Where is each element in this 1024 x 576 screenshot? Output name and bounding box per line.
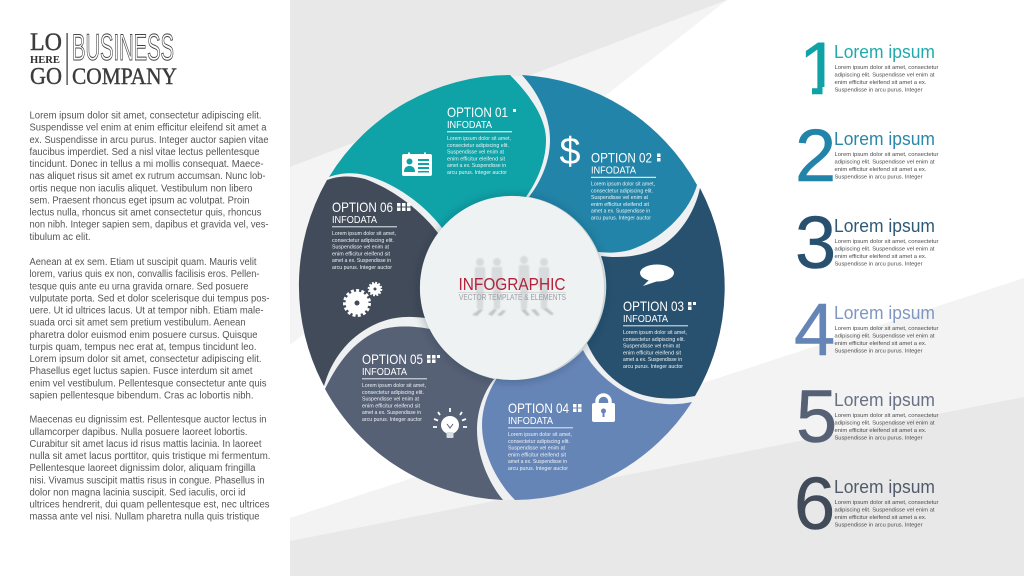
panel: legend item 3: enim efficitur eleifend sit amet a ex. bbox=[834, 254, 927, 260]
option 05 text: Suspendisse vel enim at bbox=[362, 397, 419, 403]
text block: paragraph 2: Lorem ipsum dolor sit amet, consectetur adipiscing elit. bbox=[30, 354, 262, 365]
panel: legend item 4: Lorem ipsum dolor sit amet, consectetur bbox=[834, 326, 939, 332]
logo: HERE bbox=[30, 55, 60, 66]
option 02 text: enim efficitur eleifend sit bbox=[591, 202, 649, 208]
panel: legend item 4: 4 bbox=[794, 288, 835, 371]
text block: paragraph 1: tincidunt. Donec in tellus a mi mollis consequat. Maece- bbox=[30, 159, 264, 170]
option 01 text: OPTION 01 bbox=[447, 104, 508, 120]
option 05 text bbox=[362, 351, 440, 423]
logo: GO bbox=[30, 64, 62, 90]
panel: legend item 5: enim efficitur eleifend sit amet a ex. bbox=[834, 428, 927, 434]
option 05 text: arcu purus. Integer auctor bbox=[362, 417, 422, 423]
text block: paragraph 1: Suspendisse vel enim at enim efficitur eleifend sit amet a bbox=[30, 123, 267, 134]
option 01 text bbox=[447, 104, 516, 176]
panel: legend item 6 bbox=[794, 462, 939, 545]
text block: paragraph 1: tibulum ac elit. bbox=[30, 232, 90, 243]
segment 5 bbox=[325, 326, 503, 500]
panel: legend item 4 bbox=[794, 288, 939, 371]
option 01 text: amet a ex. Suspendisse in bbox=[447, 163, 506, 169]
panel: legend item 6: Suspendisse in arcu purus. Integer bbox=[834, 522, 923, 528]
panel: legend item 3: Lorem ipsum bbox=[834, 216, 935, 236]
option 04 text: INFODATA bbox=[508, 415, 553, 427]
option 02 text: Suspendisse vel enim at bbox=[591, 195, 648, 201]
panel: legend item 1: adipiscing elit. Suspendisse vel enim at bbox=[834, 72, 935, 78]
panel: legend item 1 bbox=[806, 42, 938, 94]
option 02 text: arcu purus. Integer auctor bbox=[591, 216, 651, 222]
option 06 text: Lorem ipsum dolor sit amet, bbox=[332, 231, 396, 237]
option 02 text: amet a ex. Suspendisse in bbox=[591, 209, 650, 215]
logo bbox=[30, 27, 177, 90]
text block: paragraph 1: faucibus imperdiet. Sed a nisl vitae lectus pellentesque bbox=[30, 147, 260, 158]
option 03 text: enim efficitur eleifend sit bbox=[623, 350, 681, 356]
option 02 text: INFODATA bbox=[591, 164, 636, 176]
panel: legend item 4: enim efficitur eleifend sit amet a ex. bbox=[834, 341, 927, 347]
panel: legend item 6: enim efficitur eleifend sit amet a ex. bbox=[834, 515, 927, 521]
option 06 text: INFODATA bbox=[332, 214, 377, 226]
panel: legend item 4: adipiscing elit. Suspendisse vel enim at bbox=[834, 334, 935, 340]
text block: paragraph 2: pharetra dolor euismod enim posuere cursus. Quisque bbox=[30, 330, 258, 341]
icon: lock bbox=[592, 395, 615, 422]
panel: legend item 1: 1 bbox=[799, 27, 840, 110]
segment 4 bbox=[482, 350, 692, 500]
center circle bbox=[420, 196, 604, 380]
segment 1 bbox=[329, 75, 546, 228]
text block: paragraph 1: ortis neque non iaculis aliquet. Vestibulum non libero bbox=[30, 183, 253, 194]
panel: legend item 2: enim efficitur eleifend sit amet a ex. bbox=[834, 167, 927, 173]
option 05 text: enim efficitur eleifend sit bbox=[362, 403, 420, 409]
option 06 text bbox=[332, 199, 410, 271]
option 05 text: INFODATA bbox=[362, 366, 407, 378]
text block: paragraph 2: lorem, varius quis ex non, convallis facilisis eros. Pellen- bbox=[30, 269, 260, 280]
panel: legend item 5: Lorem ipsum dolor sit amet, consectetur bbox=[834, 413, 939, 419]
text block: paragraph 2: turpis quam, tempus nec erat at, tempus tincidunt leo. bbox=[30, 342, 256, 353]
option 03 text: INFODATA bbox=[623, 313, 668, 325]
option 03 text: OPTION 03 bbox=[623, 298, 684, 314]
text block: paragraph 3: nulla sit amet lacus porttitor, quis tristique mi fermentum. bbox=[30, 451, 270, 462]
panel: legend item 2: Lorem ipsum bbox=[834, 129, 935, 149]
text block: paragraph 1: sem. Praesent rhoncus eget ipsum ac volutpat. Proin bbox=[30, 195, 250, 206]
text block: paragraph 1: non nibh. Integer sapien sem, dapibus et gravida vel, ves- bbox=[30, 220, 268, 231]
text block: paragraph 2: suada orci sit amet sem pretium vestibulum. Aenean bbox=[30, 318, 246, 329]
panel: legend item 5: Suspendisse in arcu purus. Integer bbox=[834, 436, 923, 442]
option 01 text: Lorem ipsum dolor sit amet, bbox=[447, 136, 511, 142]
panel: legend item 2: Lorem ipsum dolor sit amet, consectetur bbox=[834, 152, 939, 158]
option 06 text: arcu purus. Integer auctor bbox=[332, 265, 392, 271]
text block: paragraph 2: vulputate porta. Sed et dolor scelerisque dui tempus pos- bbox=[30, 293, 270, 304]
text block: paragraph 1: nas aliquet risus sit amet ex rutrum accumsan. Nunc lob- bbox=[30, 171, 266, 182]
option 04 text: Lorem ipsum dolor sit amet, bbox=[508, 432, 572, 438]
text block: paragraph 3: ullamcorper dapibus. Nulla posuere laoreet lobortis. bbox=[30, 427, 248, 438]
panel: legend item 3: 3 bbox=[795, 201, 836, 284]
text block: paragraph 2 bbox=[30, 257, 270, 401]
panel: legend item 3: adipiscing elit. Suspendisse vel enim at bbox=[834, 246, 935, 252]
panel: legend item 1: Lorem ipsum bbox=[834, 42, 935, 62]
panel: legend item 6: Lorem ipsum dolor sit amet, consectetur bbox=[834, 500, 939, 506]
text block: paragraph 2: sapien pellentesque bibendum. Cras ac lobortis nibh. bbox=[30, 390, 254, 401]
text block: paragraph 1: lectus nulla, rhoncus sit amet consectetur quis, rhoncus bbox=[30, 208, 262, 218]
panel: legend item 5 bbox=[796, 375, 939, 458]
option 05 text: Lorem ipsum dolor sit amet, bbox=[362, 383, 426, 389]
segment 2 bbox=[522, 75, 697, 253]
option 01 text: consectetur adipiscing elit. bbox=[447, 143, 509, 149]
option 06 text: enim efficitur eleifend sit bbox=[332, 251, 390, 257]
panel: legend item 3: Suspendisse in arcu purus. Integer bbox=[834, 262, 923, 268]
chart: circular segments bbox=[299, 75, 725, 500]
text block: paragraph 2: tesque quis ante eu urna gravida ornare. Sed posuere bbox=[30, 281, 249, 292]
text block: paragraph 3: nisi. Vivamus suscipit mattis risus in congue. Phasellus in bbox=[30, 475, 264, 486]
text block: paragraph 3: Maecenas eu dignissim est. Pellentesque auctor lectus in bbox=[30, 415, 266, 426]
panel: legend item 2: Suspendisse in arcu purus. Integer bbox=[834, 174, 923, 180]
panel: left text column bbox=[30, 27, 270, 523]
option 03 text: arcu purus. Integer auctor bbox=[623, 364, 683, 370]
option 04 text: OPTION 04 bbox=[508, 400, 569, 416]
option 05 text: OPTION 05 bbox=[362, 351, 423, 367]
panel: legend item 5: Lorem ipsum bbox=[834, 390, 935, 410]
option 04 text: amet a ex. Suspendisse in bbox=[508, 459, 567, 465]
option 04 text: arcu purus. Integer auctor bbox=[508, 466, 568, 472]
option 03 text: amet a ex. Suspendisse in bbox=[623, 357, 682, 363]
segment 6 bbox=[299, 176, 438, 386]
option 05 text: consectetur adipiscing elit. bbox=[362, 390, 424, 396]
panel: legend item 3 bbox=[795, 201, 939, 284]
panel: legend item 2 bbox=[795, 114, 939, 197]
panel: legend item 1: enim efficitur eleifend sit amet a ex. bbox=[834, 80, 927, 86]
option 01 text: INFODATA bbox=[447, 119, 492, 131]
option 05 text: amet a ex. Suspendisse in bbox=[362, 410, 421, 416]
panel: legend item 3: Lorem ipsum dolor sit amet, consectetur bbox=[834, 239, 939, 245]
panel: legend item 6: Lorem ipsum bbox=[834, 477, 935, 497]
option 04 text: enim efficitur eleifend sit bbox=[508, 452, 566, 458]
icon: dollar: $ bbox=[560, 131, 580, 173]
icon: people silhouettes bbox=[472, 256, 554, 316]
logo: LO bbox=[30, 29, 62, 56]
option 02 text: consectetur adipiscing elit. bbox=[591, 188, 653, 194]
icon: id card bbox=[402, 152, 432, 176]
heading: infographic: INFOGRAPHIC bbox=[458, 274, 566, 294]
panel: legend item 5: adipiscing elit. Suspendisse vel enim at bbox=[834, 420, 935, 426]
option 04 text: Suspendisse vel enim at bbox=[508, 446, 565, 452]
text block: paragraph 2: uere. Ut id ultrices lacus. Ut at tempor nibh. Etiam male- bbox=[30, 306, 264, 316]
panel: legend item 2: adipiscing elit. Suspendisse vel enim at bbox=[834, 160, 935, 166]
panel: legend item 2: 2 bbox=[795, 114, 836, 197]
text block: paragraph 1: ex. Suspendisse in arcu purus. Integer auctor sapien vitae bbox=[30, 135, 269, 146]
text block: paragraph 3: Pellentesque laoreet dignissim dolor, aliquam fringilla bbox=[30, 463, 256, 474]
option 06 text: Suspendisse vel enim at bbox=[332, 245, 389, 251]
option 03 text: Lorem ipsum dolor sit amet, bbox=[623, 330, 687, 336]
text block: paragraph 2: Phasellus eget luctus sapien. Fusce interdum sit amet bbox=[30, 366, 253, 377]
option 04 text: consectetur adipiscing elit. bbox=[508, 439, 570, 445]
option 06 text: OPTION 06 bbox=[332, 199, 393, 215]
panel: legend item 4: Lorem ipsum bbox=[834, 303, 935, 323]
option 03 text bbox=[623, 298, 696, 370]
panel: legend item 6: adipiscing elit. Suspendisse vel enim at bbox=[834, 508, 935, 514]
option 04 text bbox=[508, 400, 582, 472]
option 01 text: arcu purus. Integer auctor bbox=[447, 170, 507, 176]
text block: paragraph 3: Curabitur sit amet lacus id risus mattis lacinia. In laoreet bbox=[30, 439, 262, 450]
text block: paragraph 1: Lorem ipsum dolor sit amet, consectetur adipiscing elit. bbox=[30, 110, 262, 122]
text block: paragraph 1 bbox=[30, 110, 269, 243]
option 03 text: Suspendisse vel enim at bbox=[623, 344, 680, 350]
option 01 text: Suspendisse vel enim at bbox=[447, 150, 504, 156]
option 01 text: enim efficitur eleifend sit bbox=[447, 156, 505, 162]
text block: paragraph 3 bbox=[30, 415, 270, 523]
panel: legend item 5: 5 bbox=[796, 375, 837, 458]
panel: legend item 1: Lorem ipsum dolor sit amet, consectetur bbox=[834, 65, 939, 71]
text block: paragraph 3: massa ante vel nisi. Nullam pharetra nulla quis tristique bbox=[30, 512, 260, 523]
icon: light bulb bbox=[433, 408, 467, 438]
logo: COMPANY bbox=[72, 64, 177, 89]
option 02 text: OPTION 02 bbox=[591, 150, 652, 166]
text block: paragraph 2: Aenean at ex sem. Etiam ut suscipit quam. Mauris velit bbox=[30, 257, 257, 268]
icon: speech bubble bbox=[640, 264, 674, 286]
option 06 text: amet a ex. Suspendisse in bbox=[332, 258, 391, 264]
text block: paragraph 2: enim vel vestibulum. Pellentesque consectetur ante quis bbox=[30, 378, 266, 389]
panel: legend item 1: Suspendisse in arcu purus. Integer bbox=[834, 88, 923, 94]
segment 3 bbox=[587, 188, 725, 398]
option 02 text bbox=[591, 150, 660, 222]
option 02 text: Lorem ipsum dolor sit amet, bbox=[591, 182, 655, 188]
logo: BUSINESS bbox=[72, 27, 174, 68]
text block: paragraph 3: ultrices hendrerit, dui quam pellentesque est, nec ultrices bbox=[30, 500, 270, 511]
panel: legend item 6: 6 bbox=[794, 462, 835, 545]
panel: legend item 4: Suspendisse in arcu purus. Integer bbox=[834, 348, 923, 354]
icon: gears bbox=[344, 283, 381, 316]
option 03 text: consectetur adipiscing elit. bbox=[623, 337, 685, 343]
text block: paragraph 3: dolor non magna lacinia suscipit. Sed iaculis, orci id bbox=[30, 487, 246, 498]
option 06 text: consectetur adipiscing elit. bbox=[332, 238, 394, 244]
subtitle: VECTOR TEMPLATE & ELEMENTS bbox=[459, 293, 566, 302]
